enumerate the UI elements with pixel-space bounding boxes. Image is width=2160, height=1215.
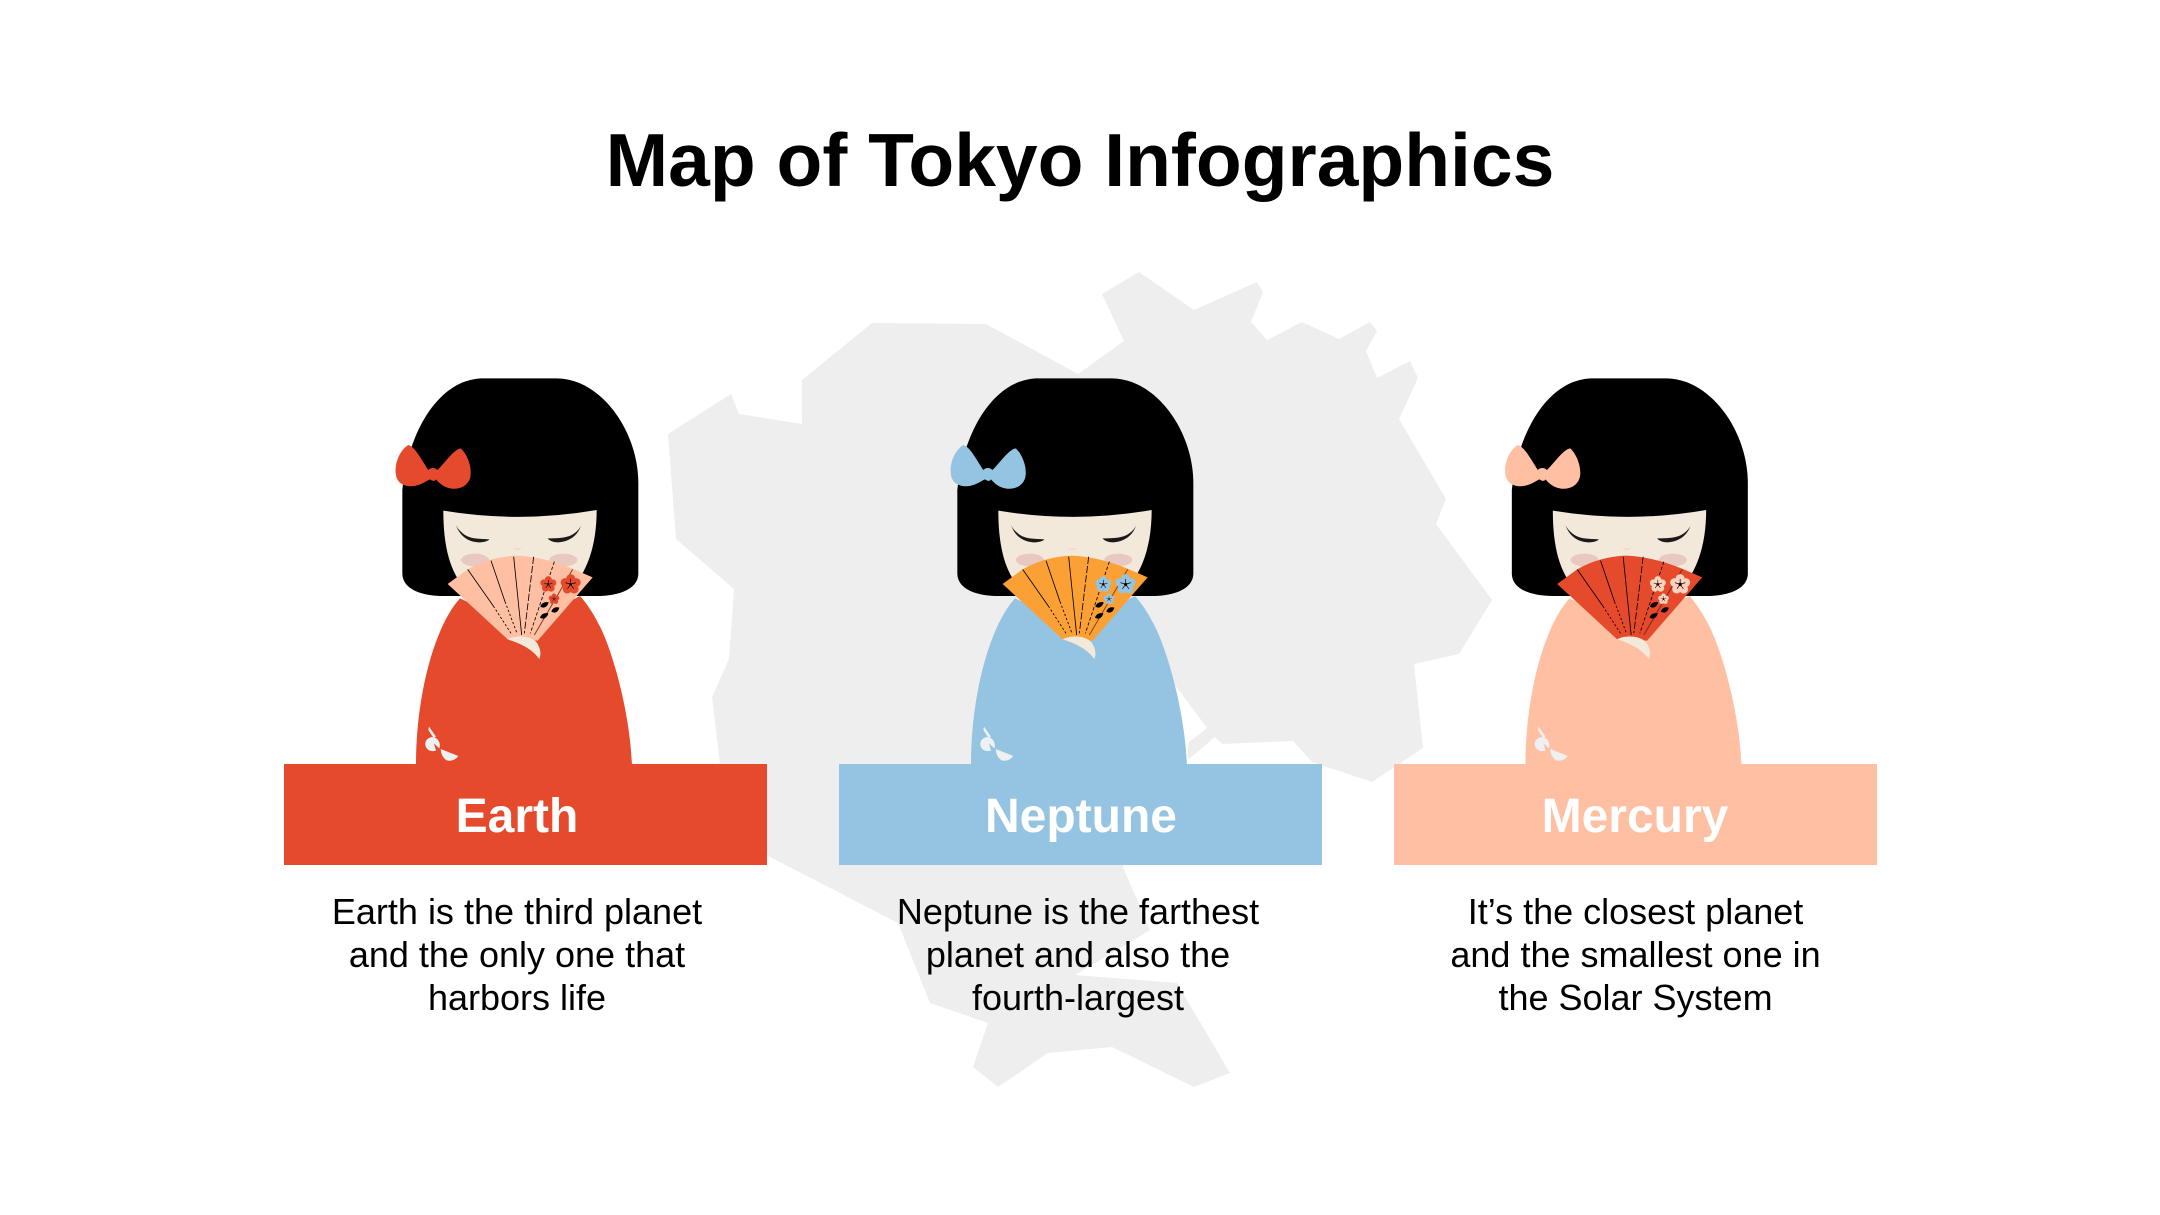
description: Neptune is the farthest xyxy=(897,891,1259,932)
hair xyxy=(957,378,1193,596)
cheeks xyxy=(1570,554,1687,566)
panel: Mercury xyxy=(1394,378,1877,1018)
bow xyxy=(951,445,1026,489)
name bar xyxy=(284,764,767,865)
fan xyxy=(448,556,593,641)
eyes xyxy=(456,525,581,542)
face xyxy=(443,510,597,590)
kokeshi figure: Neptune xyxy=(951,378,1193,765)
sleeve motif xyxy=(425,727,458,761)
sleeve motif xyxy=(1535,727,1568,761)
description: Earth is the third planet xyxy=(332,891,702,932)
face xyxy=(998,510,1152,590)
kimono xyxy=(971,596,1187,765)
description: harbors life xyxy=(428,977,606,1018)
nose xyxy=(1622,548,1632,550)
kokeshi figure: Mercury xyxy=(1505,378,1748,765)
panel: Earth xyxy=(284,378,767,1018)
hand xyxy=(1063,636,1095,659)
name: Neptune xyxy=(985,790,1177,843)
name: Mercury xyxy=(1542,790,1729,843)
kimono xyxy=(1525,596,1741,765)
cheeks xyxy=(461,554,577,566)
nose xyxy=(1067,548,1077,550)
hand xyxy=(1617,636,1650,659)
fan xyxy=(1003,556,1148,641)
kokeshi figure: Earth xyxy=(396,378,638,765)
title: Map of Tokyo Infographics xyxy=(606,118,1554,202)
description: fourth-largest xyxy=(972,977,1184,1018)
hand xyxy=(508,636,540,659)
bow xyxy=(1505,445,1580,489)
panel: Neptune xyxy=(839,378,1322,1018)
name: Earth xyxy=(456,790,578,843)
nose xyxy=(512,548,522,550)
name bar xyxy=(1394,764,1877,865)
map of Tokyo silhouette xyxy=(668,272,1492,1087)
face xyxy=(1553,510,1706,590)
description: planet and also the xyxy=(926,934,1230,975)
fan xyxy=(1557,556,1702,641)
description: the Solar System xyxy=(1498,977,1773,1018)
description: It’s the closest planet xyxy=(1468,891,1803,932)
eyes xyxy=(1565,525,1690,542)
name bar xyxy=(839,764,1322,865)
hair xyxy=(402,378,638,596)
cheeks xyxy=(1016,554,1132,566)
kimono xyxy=(416,596,632,765)
bow xyxy=(396,445,471,489)
description: and the smallest one in xyxy=(1450,934,1821,975)
eyes xyxy=(1011,525,1136,542)
description: and the only one that xyxy=(349,934,685,975)
sleeve motif xyxy=(980,727,1013,761)
hair xyxy=(1512,378,1748,596)
